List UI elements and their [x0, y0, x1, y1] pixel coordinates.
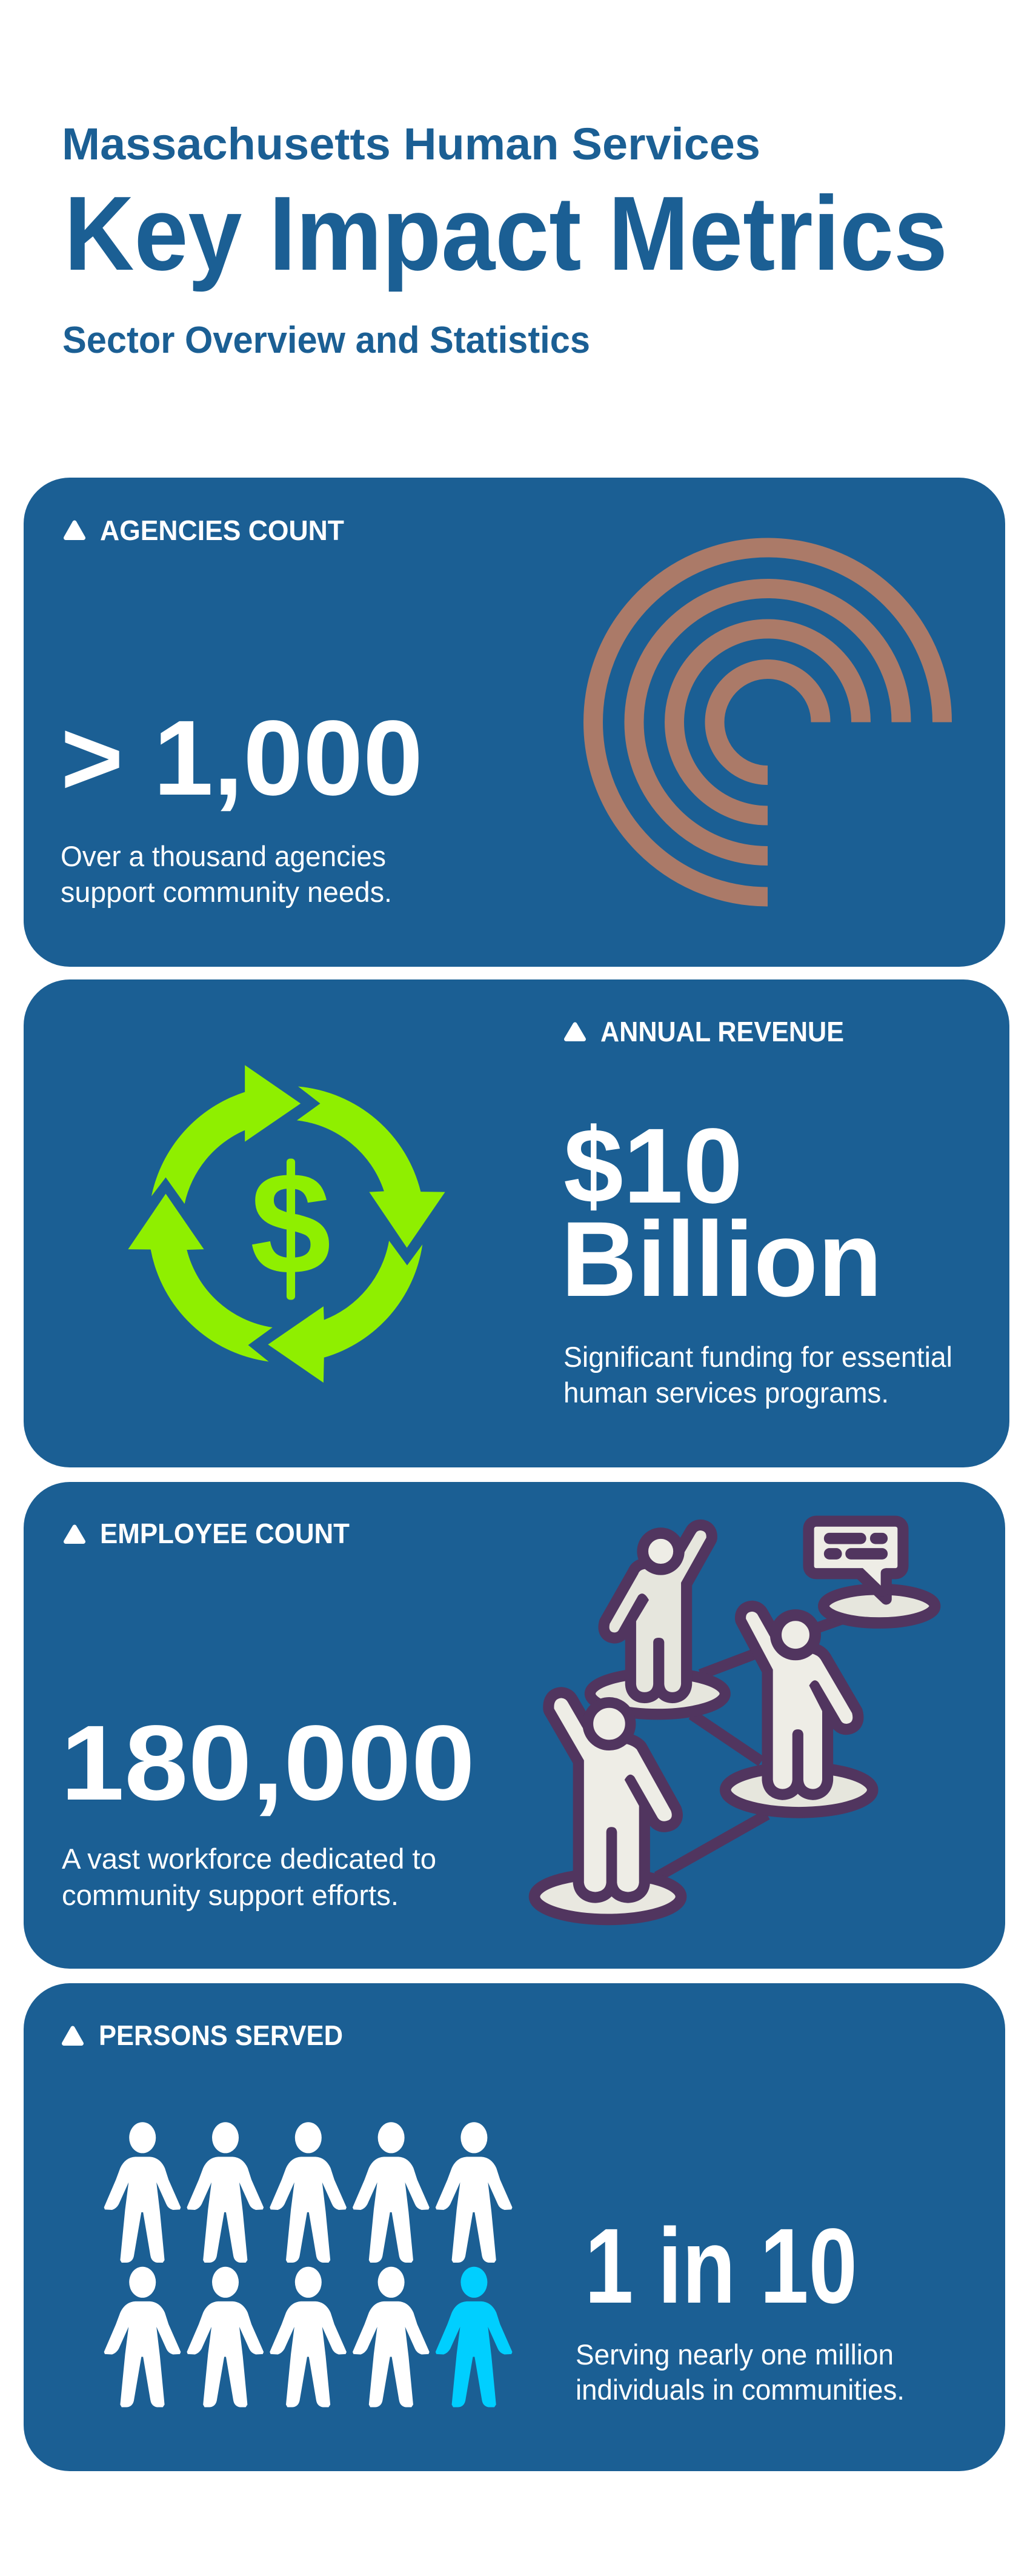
person 9 [353, 2267, 430, 2407]
eyebrow heading: Massachusetts Human Services [62, 119, 760, 169]
person 7 [187, 2267, 264, 2407]
person 6 [104, 2267, 181, 2407]
person 3 [270, 2122, 347, 2263]
description: support community needs. [61, 876, 392, 908]
person 1 [104, 2122, 181, 2263]
panel: employee count [24, 1482, 1005, 1969]
figure: top [610, 1530, 706, 1692]
subtitle: Sector Overview and Statistics [62, 319, 590, 361]
metric value: Billion [561, 1200, 882, 1319]
icon: triangle marker [566, 1024, 584, 1039]
icon: triangle marker [65, 522, 84, 538]
label: AGENCIES COUNT [100, 515, 344, 546]
icon: triangle marker [64, 2028, 81, 2044]
platform: bottom [534, 1874, 681, 1920]
description: Serving nearly one million [576, 2338, 894, 2371]
dollar sign: $ [250, 1141, 331, 1304]
icon: connected people network [534, 1527, 935, 1920]
arrow: top right [297, 1086, 445, 1248]
figure: right [746, 1612, 852, 1789]
person 4 [353, 2122, 430, 2263]
description: community support efforts. [62, 1879, 399, 1911]
metric value [561, 1107, 882, 1319]
platform: small right [823, 1589, 935, 1623]
title: Key Impact Metrics [64, 174, 948, 292]
description [62, 1843, 436, 1911]
label: ANNUAL REVENUE [600, 1016, 844, 1047]
person 2 [187, 2122, 264, 2263]
platform: top [590, 1673, 725, 1714]
arrow: bottom right [268, 1241, 422, 1383]
panel: persons served [24, 1983, 1005, 2471]
description: human services programs. [563, 1376, 889, 1409]
panel: annual revenue [24, 979, 1009, 1467]
description: Significant funding for essential [563, 1341, 952, 1373]
arrow: bottom left [128, 1193, 273, 1361]
description [563, 1341, 952, 1409]
description [576, 2338, 905, 2406]
description [61, 840, 392, 908]
metric value: 1 in 10 [585, 2207, 857, 2326]
label: PERSONS SERVED [99, 2020, 343, 2051]
person 10 highlighted [436, 2267, 513, 2407]
connector lines [657, 1619, 842, 1877]
speech bubble [814, 1527, 897, 1599]
icon: money cycle arrows with dollar sign [128, 1065, 445, 1383]
figure: bottom [554, 1698, 672, 1892]
person 5 [436, 2122, 513, 2263]
description: A vast workforce dedicated to [62, 1843, 436, 1875]
panel: agencies count [24, 478, 1005, 967]
platform: middle [725, 1767, 872, 1812]
description: individuals in communities. [576, 2374, 905, 2406]
description: Over a thousand agencies [61, 840, 386, 872]
label: EMPLOYEE COUNT [100, 1518, 350, 1549]
person 8 [270, 2267, 347, 2407]
icon: triangle marker [65, 1527, 84, 1542]
header [62, 119, 948, 361]
metric value: 180,000 [61, 1704, 475, 1823]
icon: concentric arcs [593, 548, 942, 897]
metric value: > 1,000 [61, 699, 423, 818]
arrow: top left [151, 1065, 301, 1204]
metric value: $10 [563, 1107, 743, 1226]
icon: ten people, one highlighted [104, 2122, 513, 2407]
